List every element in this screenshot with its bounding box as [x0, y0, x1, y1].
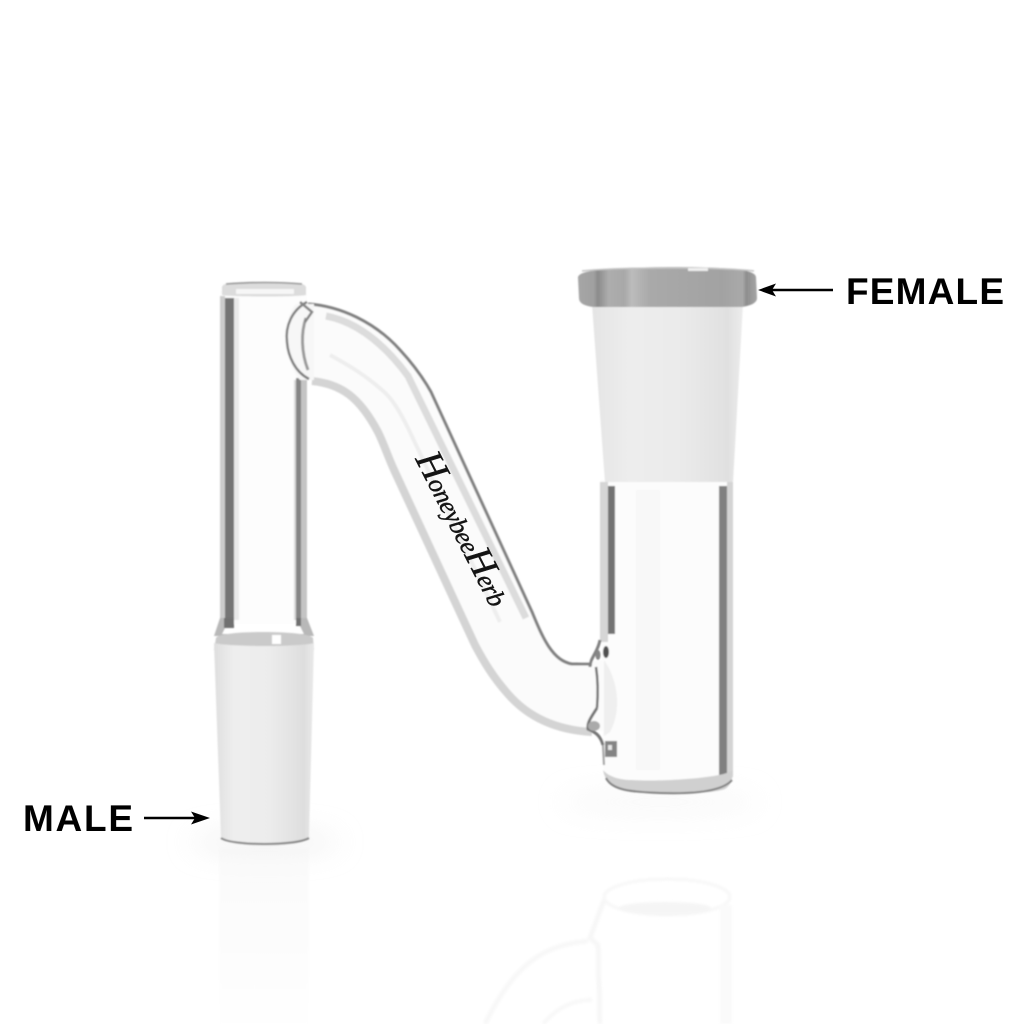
elbow junction	[604, 660, 617, 736]
elbow joint	[287, 304, 314, 380]
frosted section	[592, 304, 743, 482]
right lower tube	[588, 480, 733, 794]
male joint	[214, 618, 314, 846]
grey rim	[578, 267, 757, 307]
female joint	[578, 267, 757, 482]
arrow: male	[144, 812, 210, 824]
glass adapter body	[214, 267, 757, 846]
tube shoulder	[214, 618, 314, 636]
label: male: MALE	[23, 798, 133, 839]
right tube wall	[294, 380, 297, 620]
tube rim	[222, 283, 306, 296]
left tube wall	[600, 482, 608, 642]
left tube wall	[220, 296, 225, 622]
logo: Honeybee Herb: HoneybeeHerb	[407, 443, 521, 613]
bottom edge of bend	[312, 381, 592, 732]
bent connecting tube	[303, 303, 604, 732]
base curve	[603, 770, 733, 793]
left straight tube	[220, 282, 314, 624]
faint inner stripes	[636, 490, 660, 770]
top edge of bend	[308, 304, 592, 664]
arrow: female	[758, 284, 833, 296]
inner highlight	[330, 355, 500, 622]
floor shadow	[190, 794, 760, 852]
label: female: FEMALE	[846, 271, 1004, 312]
right tube wall	[719, 486, 727, 776]
reflection on floor	[219, 848, 732, 1024]
